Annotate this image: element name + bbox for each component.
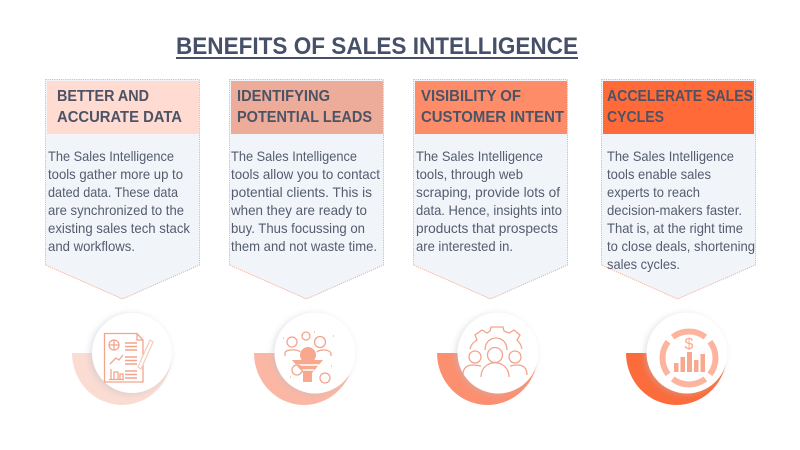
body text: are synchronized to the bbox=[48, 203, 184, 218]
body text: are interested in. bbox=[416, 239, 513, 254]
body text: tools allow you to contact bbox=[231, 167, 380, 182]
header band bbox=[603, 81, 754, 134]
body text bbox=[48, 149, 190, 254]
body text: tools enable sales bbox=[607, 167, 711, 182]
icon: gear and team bbox=[437, 312, 538, 405]
body text: potential clients. This is bbox=[231, 185, 372, 200]
panel: identifying potential leads bbox=[230, 80, 384, 299]
heading: BETTER AND bbox=[57, 88, 149, 105]
heading: CUSTOMER INTENT bbox=[421, 109, 564, 126]
heading bbox=[607, 88, 753, 126]
heading bbox=[237, 88, 372, 126]
header band bbox=[231, 81, 383, 134]
header band bbox=[47, 81, 199, 134]
body text: dated data. These data bbox=[48, 185, 178, 200]
body text: products that prospects bbox=[416, 221, 558, 236]
body text: That is, at the right time bbox=[607, 221, 743, 236]
heading bbox=[57, 88, 182, 126]
body text: when they are ready to bbox=[230, 203, 367, 218]
icon: dollar bar chart: $ bbox=[685, 336, 694, 353]
body text: and workflows. bbox=[48, 239, 135, 254]
panel: visibility of customer intent bbox=[414, 80, 568, 299]
body text bbox=[607, 149, 755, 272]
body text: data. Hence, insights into bbox=[416, 203, 562, 218]
body text: The Sales Intelligence bbox=[416, 149, 543, 164]
body text: scraping, provide lots of bbox=[416, 185, 560, 200]
heading bbox=[421, 88, 564, 126]
title: BENEFITS OF SALES INTELLIGENCE bbox=[176, 33, 578, 60]
heading: IDENTIFYING bbox=[237, 88, 330, 105]
body text: sales cycles. bbox=[607, 257, 680, 272]
body text: them and not waste time. bbox=[231, 239, 377, 254]
body text: The Sales Intelligence bbox=[231, 149, 357, 164]
body text: experts to reach bbox=[607, 185, 700, 200]
panel: better and accurate data bbox=[46, 80, 200, 299]
heading: VISIBILITY OF bbox=[421, 88, 521, 105]
icon: sales funnel with people bbox=[254, 312, 356, 405]
panel: accelerate sales cycles bbox=[602, 80, 756, 299]
body text: to close deals, shortening bbox=[607, 239, 755, 254]
icon: document with pencil bbox=[72, 313, 172, 405]
body text: The Sales Intelligence bbox=[48, 149, 174, 164]
heading: ACCELERATE SALES bbox=[607, 88, 753, 105]
body text: The Sales Intelligence bbox=[607, 149, 734, 164]
body text bbox=[416, 149, 562, 254]
body text bbox=[230, 149, 380, 254]
icon: dollar bar chart bbox=[626, 312, 728, 405]
body text: tools gather more up to bbox=[48, 167, 183, 182]
heading: POTENTIAL LEADS bbox=[237, 109, 372, 126]
body text: existing sales tech stack bbox=[48, 221, 190, 236]
body text: tools, through web bbox=[416, 167, 523, 182]
body text: decision-makers faster. bbox=[607, 203, 742, 218]
body text: buy. Thus focussing on bbox=[231, 221, 365, 236]
header band bbox=[415, 81, 567, 134]
heading: CYCLES bbox=[607, 109, 664, 126]
heading: ACCURATE DATA bbox=[57, 109, 182, 126]
